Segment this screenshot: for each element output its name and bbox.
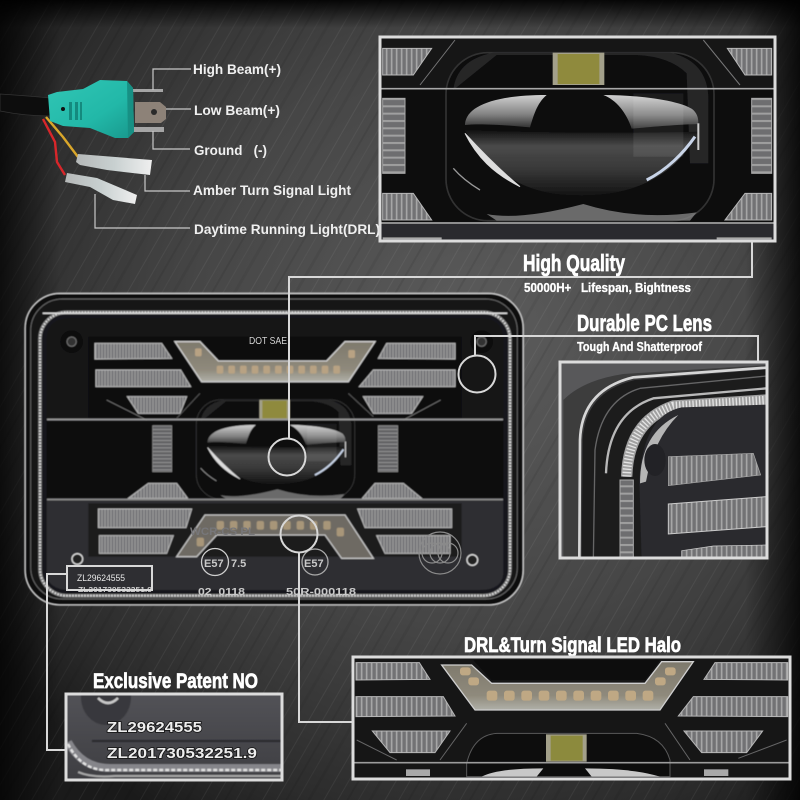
label: high beam: High Beam(+): [193, 62, 281, 77]
emblem: E57 left: E57: [204, 558, 224, 570]
panel: lens close-up: [380, 37, 775, 241]
label: amber turn signal: Amber Turn Signal Light: [193, 183, 352, 198]
panel: wiring harness connector: [0, 69, 191, 228]
leader: LED halo: [299, 552, 353, 722]
text: tough: Tough And Shatterproof: [577, 340, 703, 354]
close-up artwork: [353, 658, 790, 779]
stamp: WCR-CS PL: WCR-CS PL: [190, 526, 255, 538]
patent number two, enlarged: ZL201730532251.9: [107, 745, 257, 762]
heading: LED halo: DRL&Turn Signal LED Halo: [464, 634, 681, 657]
icon: wires: [43, 117, 78, 175]
label: low beam: Low Beam(+): [194, 103, 280, 118]
icon: top prong: [133, 89, 163, 92]
text: lifespan: 50000H+ Lifespan, Bightness: [524, 281, 691, 295]
emblem: E57 left: [202, 548, 246, 576]
callout marker: patent box: [67, 566, 152, 590]
label: ground: Ground (-): [194, 143, 267, 158]
callout marker: lens: [268, 438, 306, 476]
icon: DRL terminal: [65, 173, 137, 204]
emblem: CCC: [419, 532, 461, 574]
leader lines: [95, 69, 191, 228]
icon: amber terminal: [76, 154, 152, 175]
stamp: patent number one: ZL29624555: [77, 573, 125, 583]
leader: high quality: [289, 241, 752, 438]
close-up artwork: [380, 37, 775, 241]
patent number one, enlarged: ZL29624555: [107, 719, 202, 736]
icon: middle blade: [135, 102, 166, 123]
emblem: E57 right: E57: [304, 558, 324, 570]
stamp: approval code: 50R-000118: [286, 586, 356, 598]
emblem: E57 left: 7.5: [231, 558, 246, 570]
heading: high quality: High Quality: [523, 250, 625, 276]
emblem: E57 right: [302, 549, 328, 575]
close-up artwork: [68, 696, 280, 778]
close-up artwork: [563, 365, 767, 560]
panel: main headlight: [25, 293, 523, 605]
callout marker: LED halo: [280, 516, 318, 552]
icon: bottom prong: [133, 127, 164, 132]
heading: durable lens: Durable PC Lens: [577, 310, 712, 336]
stamp: patent number two: ZL201730532251.9: [78, 587, 152, 594]
icon: cable: [0, 94, 50, 116]
heading: patent: Exclusive Patent NO: [93, 670, 258, 693]
panel: LED halo close-up: [353, 657, 790, 779]
lamp body: [25, 293, 523, 605]
label: daytime running light: Daytime Running Light(DRL): [194, 222, 380, 237]
callout marker: PC lens: [458, 356, 496, 392]
stamp: date code: 02 0118: [198, 586, 245, 598]
panel: patent close-up: [64, 692, 284, 782]
icon: teal plug: [48, 80, 134, 138]
leader: durable lens: [475, 336, 758, 362]
leader: patent: [47, 574, 66, 750]
panel: PC lens close-up: [560, 362, 767, 560]
stamp: DOT SAE: DOT SAE: [249, 336, 287, 347]
lens (main): [196, 400, 355, 499]
